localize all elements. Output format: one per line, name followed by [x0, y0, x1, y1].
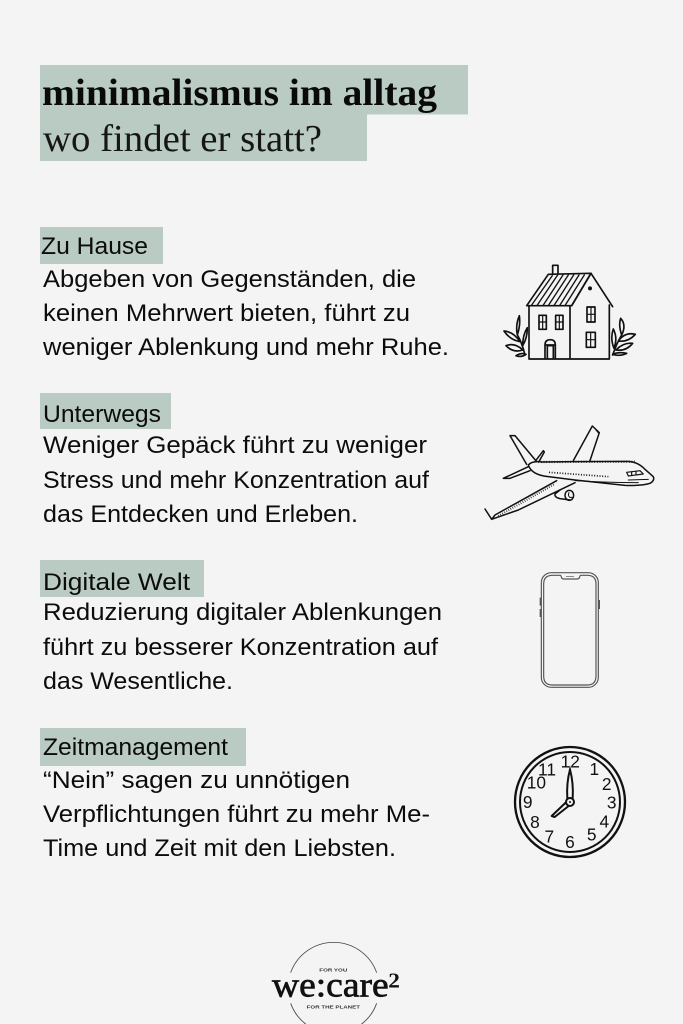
text block: zeitmanagement: Verpflichtungen führt zu mehr Me-: [43, 801, 430, 828]
icon: airplane: [485, 426, 654, 519]
icon: clock: 12: [561, 751, 580, 771]
text block: zu hause: Abgeben von Gegenständen, die: [43, 266, 416, 293]
icon: clock: 1: [590, 759, 599, 779]
panel: digitale welt: [40, 560, 442, 695]
heading: digitale welt: Digitale Welt: [43, 569, 190, 596]
icon: phone: [540, 573, 599, 687]
icon: clock: 10: [527, 773, 546, 793]
text block: unterwegs: Stress und mehr Konzentration auf: [43, 467, 429, 494]
icon: clock: 8: [530, 812, 540, 832]
text block: digitale welt: [43, 599, 442, 695]
icon: clock: 11: [538, 759, 556, 779]
subtitle: wo findet er statt?: [43, 118, 322, 160]
text block: unterwegs: das Entdecken und Erleben.: [43, 501, 358, 528]
heading: zu hause: Zu Hause: [41, 233, 148, 260]
text block: unterwegs: [43, 432, 429, 528]
text block: unterwegs: Weniger Gepäck führt zu weniger: [43, 432, 427, 459]
icon: clock: 3: [607, 793, 616, 813]
text block: zu hause: [42, 266, 449, 361]
heading: zu hause: [40, 227, 163, 264]
icon: clock: 2: [602, 774, 611, 794]
text block: digitale welt: führt zu besserer Konzentration auf: [43, 634, 438, 661]
icon: clock: 7: [545, 826, 554, 846]
icon: clock: 6: [565, 832, 575, 852]
panel: zeitmanagement: [40, 728, 430, 862]
text block: zeitmanagement: “Nein” sagen zu unnötigen: [43, 767, 350, 794]
title: minimalismus im alltag: [42, 72, 437, 114]
icon: clock: [515, 747, 625, 857]
logo: we:care: [272, 942, 400, 1024]
logo: we:care: 2: [388, 968, 400, 992]
heading: digitale welt: [40, 560, 204, 597]
text block: digitale welt: Reduzierung digitaler Ablenkungen: [43, 599, 442, 626]
panel: unterwegs: [40, 393, 429, 528]
icon: clock: 4: [600, 811, 610, 831]
logo: we:care: FOR THE PLANET: [307, 1005, 360, 1010]
text block: zu hause: weniger Ablenkung und mehr Ruhe.: [42, 334, 449, 361]
heading: zeitmanagement: Zeitmanagement: [43, 734, 228, 761]
logo: we:care: we:care: [272, 967, 389, 1005]
icon: clock: 9: [523, 792, 532, 812]
text block: zeitmanagement: Time und Zeit mit den Liebsten.: [43, 835, 396, 862]
logo: we:care: FOR YOU: [319, 967, 348, 972]
heading: unterwegs: Unterwegs: [43, 401, 161, 428]
text block: zeitmanagement: [43, 767, 430, 862]
panel: zu hause: [40, 227, 449, 361]
icon: clock: 5: [587, 825, 596, 845]
text block: zu hause: keinen Mehrwert bieten, führt zu: [43, 300, 410, 327]
icon: house: [504, 265, 635, 359]
heading: zeitmanagement: [40, 728, 246, 766]
text block: digitale welt: das Wesentliche.: [43, 668, 233, 695]
heading: unterwegs: [40, 393, 171, 429]
